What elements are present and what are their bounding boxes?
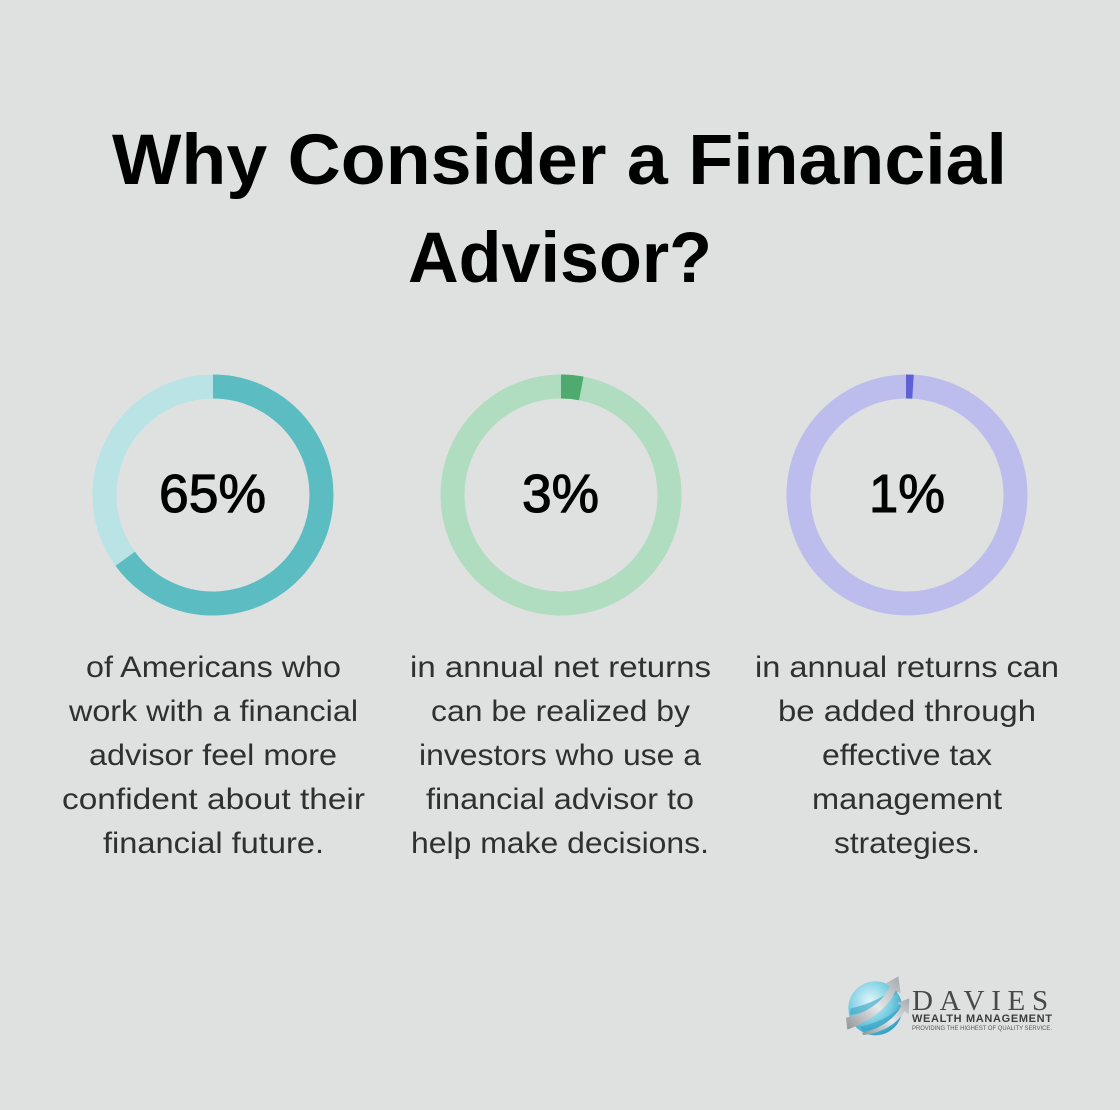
description: net returns: investors who use a xyxy=(419,739,701,772)
wordmark: DAVIES xyxy=(912,985,1055,1017)
value: 65%: 65% xyxy=(159,464,266,524)
panel: 1 percent stat xyxy=(755,386,1059,860)
description: tax management: strategies. xyxy=(834,827,980,860)
description: tax management: be added through xyxy=(778,695,1036,728)
description: net returns: financial advisor to xyxy=(426,783,694,816)
description: tax management: effective tax xyxy=(822,739,992,772)
panel: 65 percent stat xyxy=(62,386,365,860)
description: tax management xyxy=(755,651,1059,860)
description: Americans: confident about their xyxy=(62,783,365,816)
value: 3%: 3% xyxy=(522,464,599,524)
description: Americans: advisor feel more xyxy=(89,739,337,772)
description: tax management: in annual returns can xyxy=(755,651,1059,684)
subtitle: WEALTH MANAGEMENT xyxy=(912,1013,1052,1025)
description: Americans: financial future. xyxy=(103,827,324,860)
description: tax management: management xyxy=(812,783,1003,816)
description: Americans xyxy=(62,651,365,860)
panel: 3 percent stat xyxy=(410,386,711,860)
description: Americans: of Americans who xyxy=(86,651,341,684)
description: net returns: help make decisions. xyxy=(411,827,709,860)
description: net returns: can be realized by xyxy=(431,695,690,728)
title: Why Consider a Financial xyxy=(112,121,1007,200)
description: net returns xyxy=(410,651,711,860)
value: 1%: 1% xyxy=(869,464,945,524)
description: Americans: work with a financial xyxy=(68,695,358,728)
donut chart: 1% xyxy=(798,386,1016,604)
title xyxy=(112,121,1007,298)
description: net returns: in annual net returns xyxy=(410,651,711,684)
logo: Davies Wealth Management xyxy=(846,976,1055,1035)
donut chart: 3% xyxy=(452,386,670,604)
icon: globe with arrows xyxy=(846,976,909,1035)
donut chart: 65% xyxy=(104,386,322,604)
title: Advisor? xyxy=(408,219,712,298)
tagline: PROVIDING THE HIGHEST OF QUALITY SERVICE. xyxy=(912,1025,1052,1032)
